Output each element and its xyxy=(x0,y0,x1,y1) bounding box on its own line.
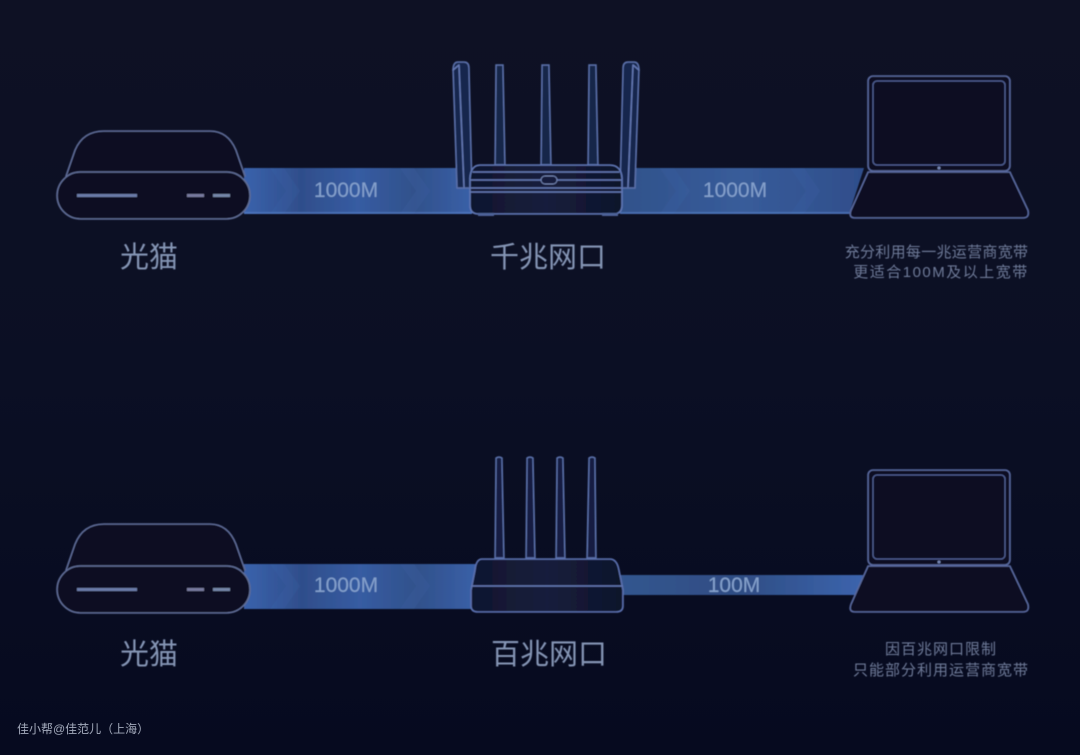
label: 1000M modem to router: 1000M xyxy=(314,574,378,597)
speed band: router to laptop xyxy=(620,168,864,214)
caption: gigabit benefit xyxy=(845,244,1029,281)
label: gigabit port: 千兆网口 xyxy=(490,242,606,274)
caption: 100M limitation: 只能部分利用运营商宽带 xyxy=(853,662,1029,679)
label: 1000M router to laptop: 1000M xyxy=(703,179,767,202)
label: modem: 光猫 xyxy=(120,241,178,274)
speed band: router to laptop xyxy=(618,575,863,595)
icon: 100M router with four antennas xyxy=(471,457,623,612)
panel: gigabit port comparison xyxy=(57,62,1029,281)
icon: laptop xyxy=(850,76,1028,218)
icon: optical modem xyxy=(57,131,250,219)
speed band: modem to router xyxy=(244,168,472,214)
speed band: modem to router xyxy=(244,564,476,609)
label: 100M router to laptop: 100M xyxy=(708,574,760,597)
caption: 100M limitation xyxy=(853,641,1029,679)
caption: gigabit benefit: 充分利用每一兆运营商宽带 xyxy=(845,244,1028,261)
label: 100M port: 百兆网口 xyxy=(491,639,607,671)
caption: 100M limitation: 因百兆网口限制 xyxy=(885,641,997,658)
panel: 100M port comparison xyxy=(57,457,1029,679)
caption: gigabit benefit: 更适合100M及以上宽带 xyxy=(853,264,1029,281)
icon: laptop xyxy=(850,470,1028,612)
icon: gigabit router with six antennas xyxy=(453,62,639,216)
label: modem: 光猫 xyxy=(120,638,178,671)
label: 1000M modem to router: 1000M xyxy=(314,179,378,202)
watermark: 佳小帮@佳范儿（上海） xyxy=(17,721,149,736)
icon: optical modem xyxy=(57,524,250,613)
